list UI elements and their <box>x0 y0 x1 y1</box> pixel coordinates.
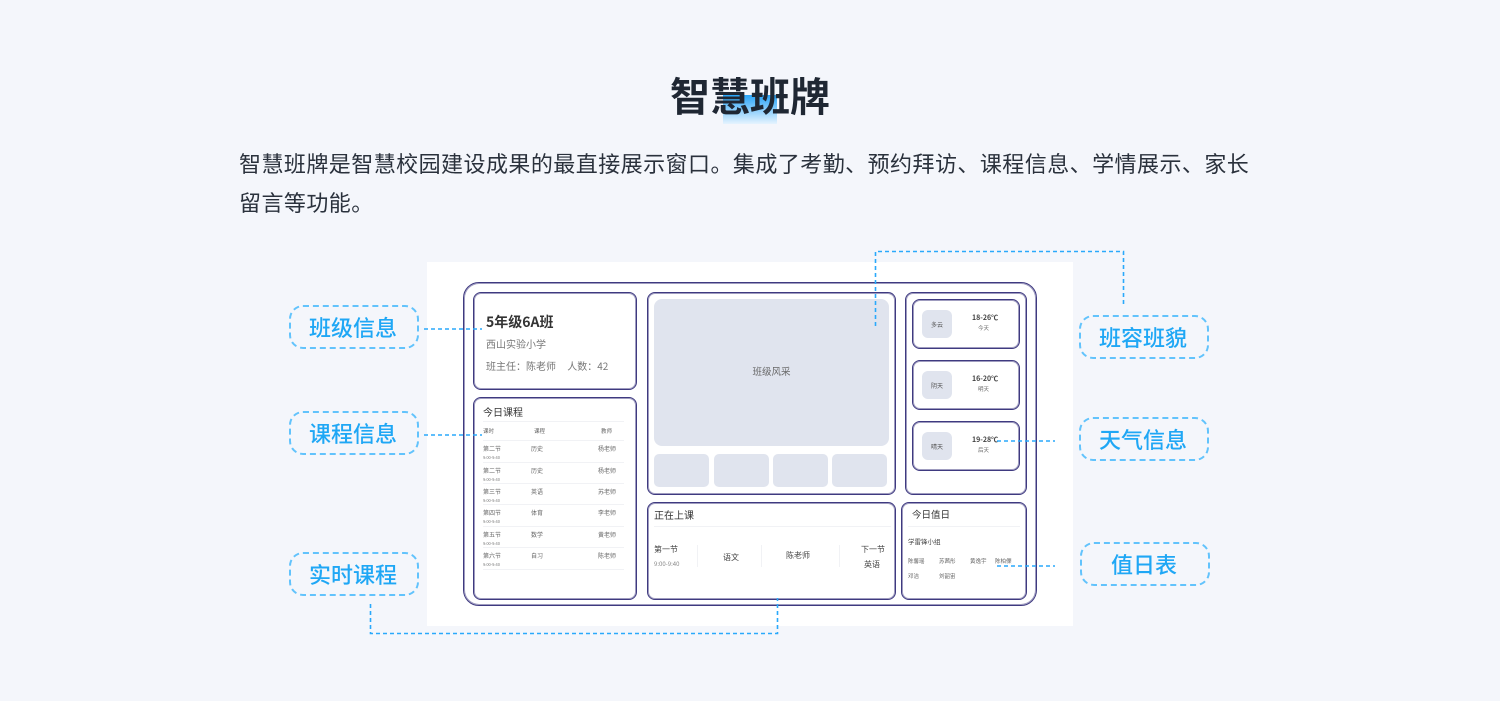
thumbnail 3 <box>773 454 828 487</box>
heading divider <box>908 526 1020 527</box>
label: realtime course <box>289 552 419 596</box>
duty names <box>908 557 1012 580</box>
table header: 课时 <box>483 427 494 435</box>
label: course info <box>289 411 419 455</box>
course row 4: 体育 <box>531 508 543 517</box>
label: weather: 天气信息 <box>1099 423 1187 455</box>
panel: smart board mockup <box>427 262 1073 626</box>
course row 6: 陈老师 <box>598 551 616 560</box>
subject: 语文 <box>723 552 739 563</box>
course row 3: 9:00-9:40 <box>483 498 500 504</box>
school name: 西山实验小学 <box>486 336 546 351</box>
next subject: 英语 <box>864 559 880 570</box>
column divider 2 <box>761 545 762 567</box>
course row 5: 黄老师 <box>598 530 616 539</box>
course row 5: 9:00-9:40 <box>483 541 500 547</box>
course row 6: 9:00-9:40 <box>483 562 500 568</box>
course row 1 <box>483 441 624 463</box>
weather icon: sunny <box>922 432 952 460</box>
day label today: 今天 <box>978 324 989 332</box>
course row 1: 杨老师 <box>598 444 616 453</box>
thumbnail 4 <box>832 454 887 487</box>
panel: weather <box>905 292 1027 495</box>
temperature day after: 19-28℃ <box>972 435 998 445</box>
day label tomorrow: 明天 <box>978 385 989 393</box>
temperature tomorrow: 16-20℃ <box>972 374 998 384</box>
weather icon: overcast <box>922 371 952 399</box>
course row 3: 苏老师 <box>598 487 616 496</box>
label: class appearance: 班容班貌 <box>1099 321 1187 353</box>
weather icon: cloudy <box>922 310 952 338</box>
title: 智慧班牌 <box>670 65 830 123</box>
column divider 3 <box>839 545 840 567</box>
course row 2: 第二节 <box>483 466 501 475</box>
teacher: 陈老师 <box>786 550 810 561</box>
courses table <box>483 421 624 571</box>
panel: today's duty <box>901 502 1027 600</box>
course row 1: 第二节 <box>483 444 501 453</box>
label: duty: 值日表 <box>1111 548 1177 580</box>
weather card: tomorrow <box>912 360 1020 410</box>
description text: 留言等功能。 <box>239 186 374 218</box>
duty names: 陈馨瑶 <box>908 557 925 565</box>
showcase main image: 班级风采 <box>752 364 790 378</box>
temperature today: 18-26℃ <box>972 313 998 323</box>
period time: 9:00-9:40 <box>654 559 679 568</box>
duty group: 学雷锋小组 <box>908 536 940 546</box>
label: weather <box>1079 417 1209 461</box>
connector: realtime course <box>370 598 778 634</box>
connector: class appearance <box>874 250 1124 326</box>
label: class appearance <box>1079 315 1209 359</box>
duty names: 陈柏傈 <box>995 557 1012 565</box>
showcase main image <box>654 299 889 446</box>
label: realtime course: 实时课程 <box>309 558 397 590</box>
course row 6 <box>483 548 624 570</box>
board outer frame <box>463 282 1037 606</box>
course row 2: 9:00-9:40 <box>483 477 500 483</box>
label: class info <box>289 305 419 349</box>
teacher and student count: 班主任：陈老师 人数：42 <box>486 358 608 373</box>
table header <box>483 422 624 441</box>
label: class info: 班级信息 <box>309 311 397 343</box>
course row 3: 英语 <box>531 487 543 496</box>
course row 4: 李老师 <box>598 508 616 517</box>
course row 4: 第四节 <box>483 508 501 517</box>
label: duty <box>1080 542 1210 586</box>
duty heading: 今日值日 <box>912 507 950 521</box>
weather icon: sunny: 晴天 <box>931 442 943 451</box>
title highlight <box>723 95 777 124</box>
course row 6: 第六节 <box>483 551 501 560</box>
weather card: today <box>912 299 1020 349</box>
connector: weather <box>997 440 1055 442</box>
course row 4: 9:00-9:40 <box>483 519 500 525</box>
panel: current class <box>647 502 896 600</box>
connector: duty <box>997 565 1055 567</box>
course row 5 <box>483 527 624 548</box>
duty names: 苏茜彤 <box>939 557 956 565</box>
description text: 智慧班牌是智慧校园建设成果的最直接展示窗口。集成了考勤、预约拜访、课程信息、学情展示、家长 <box>239 147 1249 179</box>
course row 2: 杨老师 <box>598 466 616 475</box>
weather card: day after tomorrow <box>912 421 1020 471</box>
description text <box>239 147 1249 218</box>
label: course info: 课程信息 <box>309 417 397 449</box>
courses heading: 今日课程 <box>483 404 523 419</box>
panel: class showcase <box>647 292 896 495</box>
table header: 课程 <box>534 427 545 435</box>
weather icon: overcast: 阴天 <box>931 381 943 390</box>
thumbnail 2 <box>714 454 769 487</box>
duty names: 邓洁 <box>908 572 919 580</box>
heading divider <box>654 526 891 527</box>
course row 1: 9:00-9:40 <box>483 455 500 461</box>
panel: today's courses <box>473 397 637 600</box>
class name: 5年级6A班 <box>486 312 554 332</box>
day label day after: 后天 <box>978 446 989 454</box>
course row 4 <box>483 505 624 527</box>
connector: course info <box>424 434 482 436</box>
period: 第一节 <box>654 544 678 555</box>
course row 1: 历史 <box>531 444 543 453</box>
course row 5: 第五节 <box>483 530 501 539</box>
thumbnail 1 <box>654 454 709 487</box>
duty names: 黄逸宇 <box>970 557 987 565</box>
weather icon: cloudy: 多云 <box>931 320 943 329</box>
next class label: 下一节 <box>861 544 885 555</box>
course row 2 <box>483 463 624 484</box>
current class heading: 正在上课 <box>654 507 694 522</box>
connector: class info <box>424 328 482 330</box>
course row 2: 历史 <box>531 466 543 475</box>
course row 3: 第三节 <box>483 487 501 496</box>
course row 6: 自习 <box>531 551 543 560</box>
course row 3 <box>483 484 624 505</box>
table header: 教师 <box>601 427 612 435</box>
column divider 1 <box>697 545 698 567</box>
course row 5: 数学 <box>531 530 543 539</box>
panel: class info <box>473 292 637 390</box>
duty names: 刘韶宙 <box>939 572 956 580</box>
